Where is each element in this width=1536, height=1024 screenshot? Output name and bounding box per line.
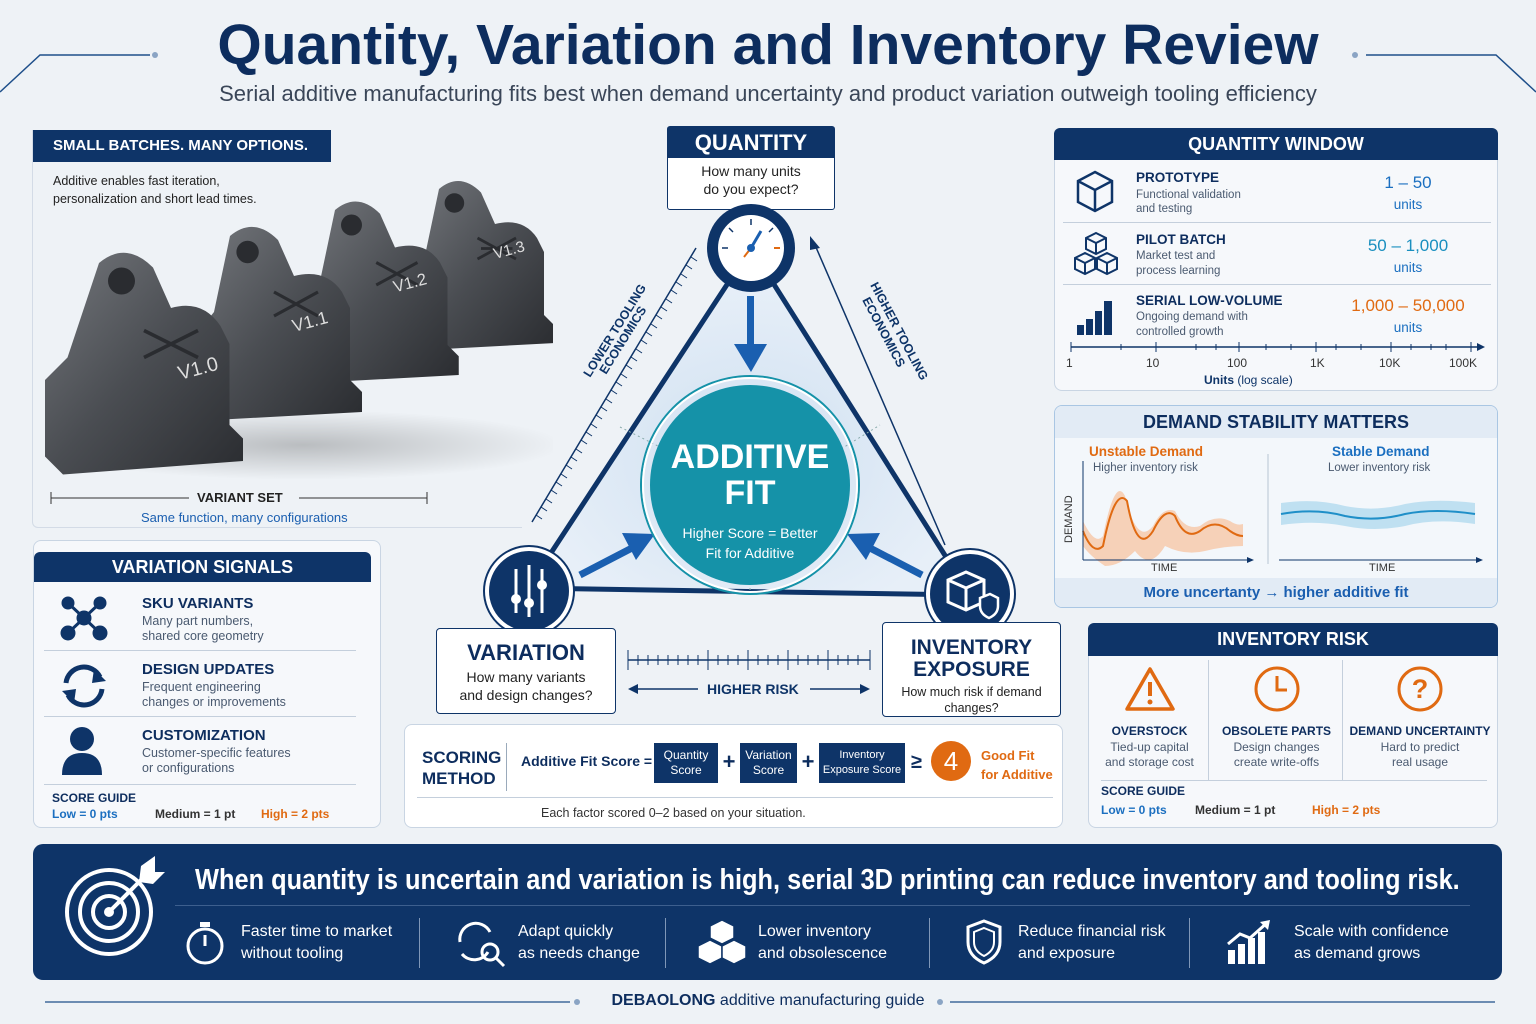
- panel: scoring method: +: [723, 749, 735, 774]
- icon: gauge: [707, 204, 795, 292]
- log scale axis: 10K: [1379, 356, 1400, 370]
- score guide: [52, 791, 329, 821]
- footer: DEBAOLONG additive manufacturing guide: [611, 992, 925, 1009]
- score guide: Medium = 1 pt: [1195, 803, 1275, 817]
- item: obsolete parts: OBSOLETE PARTS: [1222, 724, 1331, 738]
- charts: TIME: [1151, 562, 1177, 574]
- item: demand uncertainty: [1349, 666, 1491, 769]
- item: overstock: OVERSTOCK: [1112, 724, 1187, 738]
- panel: inventory risk: INVENTORY RISK: [1217, 629, 1369, 649]
- panel: scoring method: ≥: [911, 751, 922, 773]
- row: serial low-volume: controlled growth: [1136, 326, 1224, 338]
- benefit: faster: Faster time to market: [241, 923, 392, 940]
- item: demand uncertainty: ?: [1412, 674, 1428, 704]
- panel: inventory risk: [1088, 623, 1498, 828]
- benefit: adapt: Adapt quickly: [518, 923, 613, 940]
- item: overstock: Tied-up capital: [1110, 740, 1189, 754]
- score guide: Low = 0 pts: [52, 807, 118, 821]
- benefit: faster: [186, 922, 392, 964]
- item: obsolete parts: Design changes: [1233, 740, 1320, 754]
- log scale axis: Units (log scale): [1204, 373, 1293, 387]
- benefit: inventory: Lower inventory: [758, 923, 871, 940]
- row: serial low-volume: SERIAL LOW-VOLUME: [1136, 293, 1282, 308]
- row: pilot batch: PILOT BATCH: [1136, 232, 1226, 247]
- item: design updates: Frequent engineering: [142, 680, 261, 694]
- benefit: financial: [929, 918, 1189, 968]
- item: overstock: [1091, 660, 1209, 780]
- panel: demand stability: Stable Demand: [1332, 444, 1430, 459]
- log scale axis: 10: [1146, 356, 1160, 370]
- score guide: SCORE GUIDE: [52, 791, 136, 805]
- item: obsolete parts: create write-offs: [1234, 755, 1319, 769]
- score guide: High = 2 pts: [261, 807, 329, 821]
- triangle diagram: [531, 236, 948, 597]
- heading tab: [33, 130, 331, 162]
- row: pilot batch: [1063, 223, 1491, 285]
- panel: quantity window: [1054, 128, 1498, 391]
- panel: scoring method: SCORING: [422, 748, 501, 767]
- bottom banner: [33, 844, 1502, 980]
- benefit: inventory: and obsolescence: [758, 945, 887, 962]
- score guide: SCORE GUIDE: [1101, 784, 1185, 798]
- row: pilot batch: units: [1394, 260, 1422, 275]
- item: sku variants: SKU VARIANTS: [142, 595, 253, 612]
- panel: scoring method: Exposure Score: [823, 764, 901, 776]
- quantity box: QUANTITY: [695, 130, 807, 155]
- item: sku variants: shared core geometry: [142, 629, 264, 643]
- panel: scoring method: 4: [944, 746, 958, 776]
- center: additive fit circle: ADDITIVE: [671, 438, 829, 476]
- panel: scoring method: Each factor scored 0–2 based on your situation.: [541, 806, 806, 820]
- inventory exposure box: EXPOSURE: [913, 658, 1030, 681]
- item: overstock: and storage cost: [1105, 755, 1194, 769]
- variant set label: Same function, many configurations: [141, 510, 348, 525]
- row: pilot batch: process learning: [1136, 265, 1220, 277]
- charts: DEMAND: [1063, 495, 1075, 543]
- charts: [1063, 454, 1483, 574]
- headline: When quantity is uncertain and variation is high, serial 3D printing can reduce inventory and tooling risk.: [195, 864, 1460, 896]
- log scale axis: 1: [1066, 356, 1073, 370]
- heading tab: SMALL BATCHES. MANY OPTIONS.: [53, 137, 308, 154]
- intro text: personalization and short lead times.: [53, 192, 257, 206]
- triangle diagram: HIGHER TOOLING: [867, 280, 931, 382]
- panel: scoring method: Variation: [745, 748, 792, 762]
- score guide: High = 2 pts: [1312, 803, 1380, 817]
- panel: scoring method: Quantity: [664, 748, 708, 762]
- panel: scoring method: for Additive: [981, 767, 1053, 782]
- item: demand uncertainty: Hard to predict: [1381, 740, 1459, 754]
- panel: scoring method: Additive Fit Score =: [521, 753, 652, 769]
- variation box: [436, 628, 616, 714]
- variation box: and design changes?: [459, 687, 593, 703]
- score guide: Low = 0 pts: [1101, 803, 1167, 817]
- panel: scoring method: Inventory: [839, 749, 885, 761]
- log scale axis: [1066, 342, 1485, 387]
- item: customization: CUSTOMIZATION: [142, 727, 266, 744]
- item: design updates: [44, 653, 356, 717]
- icon: inventory box shield: [924, 548, 1016, 622]
- benefit: scale: as demand grows: [1294, 945, 1420, 962]
- higher risk scale: HIGHER RISK: [707, 681, 799, 697]
- inventory exposure box: [882, 622, 1061, 717]
- heading: VARIATION SIGNALS: [112, 557, 293, 577]
- parts image: V1.0: [176, 353, 221, 385]
- center: additive fit circle: [642, 377, 858, 593]
- quantity box: [667, 126, 835, 210]
- icon: variation sliders: [483, 545, 575, 628]
- benefit: faster: without tooling: [241, 945, 343, 962]
- row: serial low-volume: units: [1394, 320, 1422, 335]
- row: prototype: 1 – 50: [1384, 173, 1432, 192]
- log scale axis: 100: [1227, 356, 1247, 370]
- inventory exposure box: INVENTORY: [911, 636, 1032, 659]
- panel: quantity window: QUANTITY WINDOW: [1188, 134, 1364, 154]
- item: customization: Customer-specific features: [142, 746, 291, 760]
- benefit: scale: Scale with confidence: [1294, 923, 1449, 940]
- panel: scoring method: Good Fit: [981, 748, 1034, 763]
- row: prototype: [1063, 161, 1491, 223]
- variant set label: VARIANT SET: [197, 490, 283, 505]
- higher risk scale: [628, 650, 870, 697]
- row: prototype: PROTOTYPE: [1136, 170, 1219, 185]
- benefit: adapt: as needs change: [518, 945, 640, 962]
- parts image: V1.3: [492, 238, 527, 263]
- icon: target: [65, 856, 165, 956]
- benefit: inventory: [665, 918, 925, 968]
- center: additive fit circle: Higher Score = Better: [682, 525, 818, 541]
- panel: scoring method: +: [802, 749, 814, 774]
- title: Quantity, Variation and Inventory Review: [217, 13, 1319, 77]
- triangle diagram: ECONOMICS: [597, 304, 649, 377]
- item: sku variants: [44, 589, 356, 651]
- row: prototype: units: [1394, 197, 1422, 212]
- panel: demand stability: Lower inventory risk: [1328, 462, 1430, 474]
- parts image: V1.2: [391, 270, 429, 296]
- row: prototype: Functional validation: [1136, 189, 1241, 201]
- item: customization: or configurations: [142, 761, 234, 775]
- score guide: [1101, 784, 1380, 817]
- parts image: V1.1: [290, 307, 330, 336]
- panel: demand stability: Unstable Demand: [1089, 444, 1203, 459]
- panel: scoring method: Score: [670, 763, 702, 777]
- parts image: [45, 181, 553, 474]
- panel: demand stability: More uncertanty → higher additive fit: [1143, 584, 1409, 601]
- item: sku variants: Many part numbers,: [142, 614, 253, 628]
- center: additive fit circle: Fit for Additive: [706, 545, 794, 561]
- item: design updates: DESIGN UPDATES: [142, 661, 274, 678]
- panel: scoring method: Score: [753, 763, 784, 777]
- quantity box: do you expect?: [704, 181, 798, 197]
- panel: scoring method: METHOD: [422, 769, 496, 788]
- row: pilot batch: Market test and: [1136, 250, 1215, 262]
- benefit: scale: [1189, 918, 1449, 968]
- row: serial low-volume: Ongoing demand with: [1136, 311, 1248, 323]
- item: obsolete parts: [1211, 660, 1343, 780]
- quantity box: How many units: [701, 163, 801, 179]
- triangle diagram: LOWER TOOLING: [581, 282, 649, 380]
- panel: demand stability: Higher inventory risk: [1093, 462, 1198, 474]
- row: serial low-volume: 1,000 – 50,000: [1351, 296, 1465, 315]
- variation box: How many variants: [466, 669, 586, 685]
- row: serial low-volume: [1077, 293, 1465, 338]
- panel: small batches: [32, 130, 522, 528]
- benefit: adapt: [419, 918, 659, 968]
- benefit: financial: Reduce financial risk: [1018, 923, 1166, 940]
- benefit: financial: and exposure: [1018, 945, 1115, 962]
- subtitle: Serial additive manufacturing fits best when demand uncertainty and product variation outweigh tooling efficiency: [219, 81, 1317, 106]
- charts: TIME: [1369, 562, 1395, 574]
- heading: [34, 552, 371, 582]
- inventory exposure box: How much risk if demand: [901, 685, 1042, 699]
- item: demand uncertainty: DEMAND UNCERTAINTY: [1349, 724, 1491, 738]
- log scale axis: 1K: [1310, 356, 1325, 370]
- row: prototype: and testing: [1136, 203, 1192, 215]
- score guide: Medium = 1 pt: [155, 807, 235, 821]
- intro text: Additive enables fast iteration,: [53, 174, 220, 188]
- variation box: VARIATION: [467, 640, 585, 665]
- panel: variation signals: [33, 540, 381, 828]
- item: customization: [44, 719, 356, 785]
- row: pilot batch: 50 – 1,000: [1368, 236, 1448, 255]
- inventory exposure box: changes?: [944, 701, 999, 715]
- item: design updates: changes or improvements: [142, 695, 286, 709]
- intro text: [53, 174, 257, 206]
- panel: scoring method: [404, 724, 1063, 828]
- variant set label: [50, 490, 428, 525]
- panel: demand stability: DEMAND STABILITY MATTERS: [1143, 412, 1409, 432]
- triangle diagram: ECONOMICS: [859, 295, 908, 369]
- log scale axis: 100K: [1449, 356, 1477, 370]
- item: demand uncertainty: real usage: [1392, 755, 1448, 769]
- panel: demand stability: [1054, 405, 1498, 608]
- center: additive fit circle: FIT: [724, 474, 775, 512]
